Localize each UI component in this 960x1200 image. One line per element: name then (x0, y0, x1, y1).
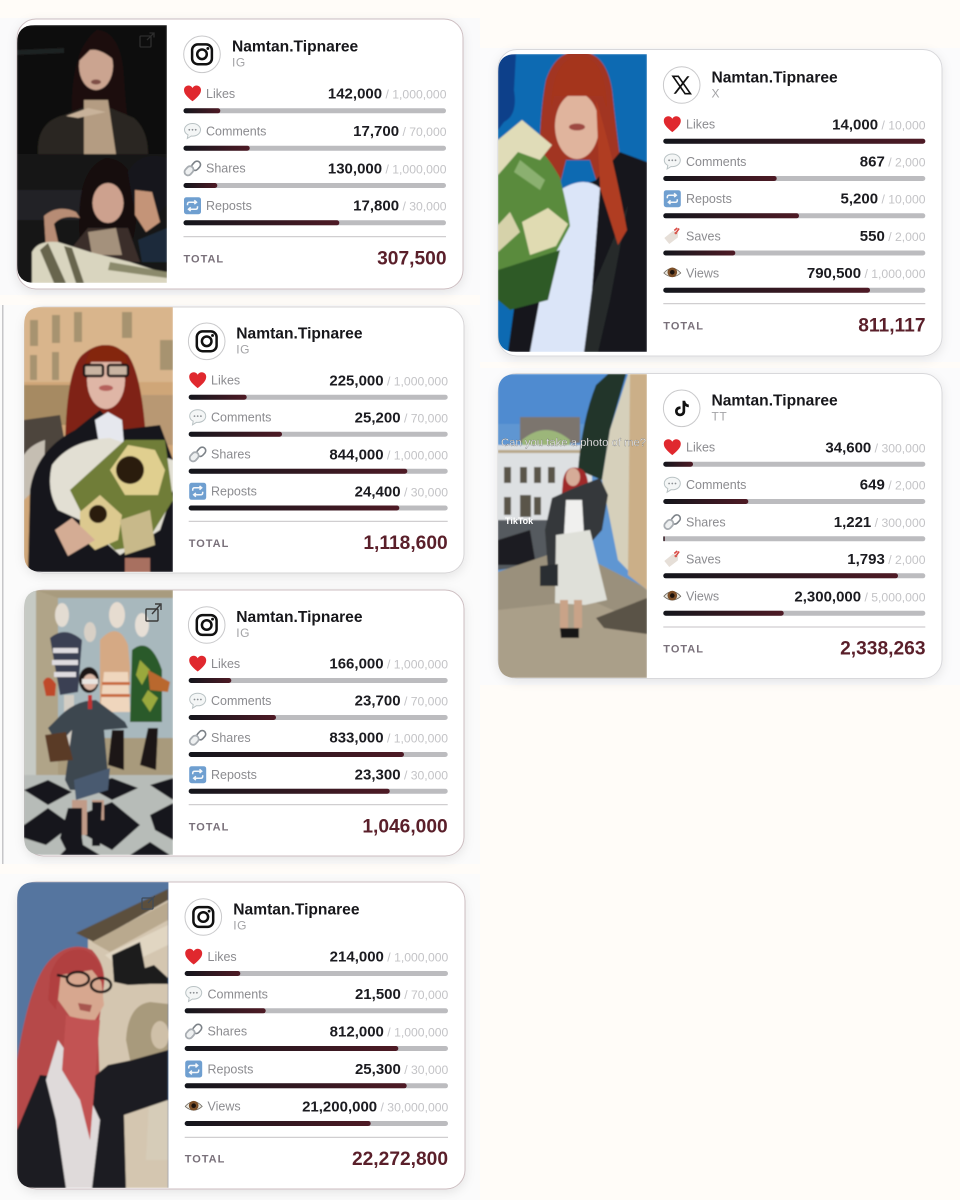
total: 307,500 (377, 248, 446, 270)
row: reposts: Reposts (206, 199, 252, 213)
row: likes (185, 949, 449, 976)
row: saves: Saves (686, 552, 721, 566)
row: likes: Likes (686, 441, 715, 455)
total (185, 1149, 448, 1170)
total: TOTAL (663, 643, 704, 655)
row: saves: 550 / 2,000 (860, 228, 926, 245)
card background (498, 50, 942, 356)
row: comments: Comments (211, 694, 271, 708)
total: TOTAL (663, 320, 704, 332)
row: reposts (189, 483, 448, 510)
row: views (185, 1098, 449, 1126)
TikTok watermark: TikTok (505, 516, 534, 526)
name: Namtan.Tipnaree (236, 609, 363, 626)
row: shares: Shares (206, 162, 246, 176)
platform: IG (236, 626, 250, 640)
row: views (663, 265, 926, 293)
row: reposts (185, 1060, 449, 1088)
row: likes: 14,000 / 10,000 (832, 116, 926, 133)
card background (24, 307, 464, 573)
row: reposts: Reposts (211, 485, 257, 499)
total: TOTAL (184, 253, 224, 265)
row: comments: 23,700 / 70,000 (355, 693, 448, 710)
row: saves (663, 228, 926, 256)
card background (24, 590, 464, 856)
row: shares: Shares (686, 515, 726, 529)
avatar: Instagram (188, 607, 225, 643)
row: likes: Likes (206, 87, 235, 101)
name: Namtan.Tipnaree (712, 69, 838, 86)
row: shares: 1,221 / 300,000 (834, 514, 926, 531)
avatar: Instagram (188, 323, 225, 360)
panel: X card 811,117 (498, 50, 942, 356)
row: shares (188, 729, 448, 757)
row: likes: 142,000 / 1,000,000 (328, 86, 447, 102)
row: views: 21,200,000 / 30,000,000 (302, 1098, 449, 1115)
avatar: TikTok (663, 390, 700, 427)
card background (498, 374, 942, 678)
row: likes (184, 86, 447, 113)
total (663, 316, 926, 337)
row: comments: Comments (211, 411, 271, 425)
row: comments (663, 154, 926, 181)
photo caption: Can you take a photo of me? (501, 437, 646, 449)
row: comments: Comments (206, 124, 266, 138)
icon: external link (146, 604, 161, 621)
row: views (663, 588, 926, 616)
row: comments: 21,500 / 70,000 (355, 986, 449, 1003)
row: views: Views (686, 266, 719, 280)
card background (18, 882, 465, 1189)
platform: TT (712, 410, 727, 424)
row: comments: 25,200 / 70,000 (355, 409, 448, 426)
row: shares: 812,000 / 1,000,000 (330, 1023, 449, 1040)
row: likes: 34,600 / 300,000 (825, 439, 926, 456)
total: 1,046,000 (362, 816, 448, 837)
row: shares (184, 1023, 449, 1051)
total: TOTAL (189, 821, 229, 833)
row: shares: 130,000 / 1,000,000 (328, 160, 447, 177)
panel: TikTok card 2,338,263 (498, 374, 942, 678)
total (189, 533, 448, 554)
icon: external link (140, 33, 154, 47)
total (663, 639, 926, 660)
total: TOTAL (189, 538, 229, 550)
row: saves: Saves (686, 229, 721, 243)
row: comments: 17,700 / 70,000 (353, 123, 447, 140)
row: likes (189, 372, 448, 400)
total (189, 816, 448, 837)
row: shares: Shares (211, 448, 251, 462)
row: comments (184, 123, 447, 151)
row: views: Views (686, 590, 719, 604)
row: saves (663, 551, 926, 578)
row: reposts: 23,300 / 30,000 (355, 767, 448, 784)
row: comments: Comments (208, 987, 268, 1001)
row: reposts: 24,400 / 30,000 (355, 483, 448, 500)
platform: IG (232, 56, 246, 70)
row: comments: Comments (686, 155, 746, 169)
row: shares: 833,000 / 1,000,000 (329, 730, 448, 747)
panel: Instagram card 1,118,600 (24, 307, 464, 573)
total (184, 248, 446, 270)
row: comments (663, 477, 926, 504)
name: Namtan.Tipnaree (712, 393, 838, 410)
row: likes: Likes (211, 657, 240, 671)
row: likes: Likes (686, 118, 715, 132)
panel: Instagram card 307,500 (17, 19, 463, 289)
total: 2,338,263 (840, 639, 926, 660)
row: shares: Shares (208, 1025, 247, 1039)
row: likes (189, 656, 448, 683)
row: comments (189, 693, 448, 720)
total: 811,117 (858, 316, 926, 337)
photo: red-haired woman with sunflowers on blue (498, 52, 647, 352)
row: reposts: Reposts (208, 1062, 253, 1076)
total: 1,118,600 (363, 533, 448, 554)
row: shares (663, 513, 926, 541)
avatar: X (663, 67, 700, 103)
row: views: 2,300,000 / 5,000,000 (794, 588, 926, 605)
platform: X (712, 86, 720, 100)
row: likes (663, 439, 926, 467)
photo: woman with glasses and sunflower bouquet (24, 307, 173, 572)
row: reposts: Reposts (686, 192, 732, 206)
total: TOTAL (185, 1154, 225, 1166)
row: likes: Likes (208, 950, 237, 964)
photo: woman in white skirt on a street in Milan (498, 374, 647, 678)
row: reposts: 5,200 / 10,000 (841, 191, 926, 208)
name: Namtan.Tipnaree (236, 326, 363, 343)
icon: external link (142, 896, 155, 909)
name: Namtan.Tipnaree (232, 39, 359, 56)
photo: red-haired woman with glasses against stone building (17, 882, 169, 1188)
row: comments: 867 / 2,000 (860, 154, 926, 170)
name: Namtan.Tipnaree (233, 902, 360, 918)
panel: Instagram card 1,046,000 (24, 590, 464, 856)
row: reposts: 17,800 / 30,000 (353, 198, 447, 215)
row: comments: 649 / 2,000 (860, 477, 926, 494)
row: reposts (189, 766, 448, 794)
photo: woman posing by a boutique window with mannequins (24, 590, 173, 855)
row: comments (189, 409, 448, 437)
photo: two portraits of a woman in a leather jacket (17, 25, 167, 283)
row: shares (183, 160, 447, 188)
avatar: Instagram (184, 36, 220, 73)
row: reposts: Reposts (211, 768, 257, 782)
row: likes: 225,000 / 1,000,000 (329, 372, 448, 389)
avatar: Instagram (185, 899, 222, 935)
row: saves: 1,793 / 2,000 (847, 551, 926, 568)
platform: IG (236, 343, 250, 357)
row: shares (188, 446, 448, 474)
row: likes: Likes (211, 374, 240, 388)
row: shares: Shares (211, 731, 251, 745)
row: comments (185, 986, 449, 1013)
row: comments: Comments (686, 478, 746, 492)
row: likes: 166,000 / 1,000,000 (329, 656, 448, 673)
panel: Instagram card 22,272,800 (17, 882, 465, 1189)
row: reposts (184, 197, 447, 225)
row: views: Views (208, 1100, 241, 1114)
total: 22,272,800 (352, 1149, 448, 1170)
row: reposts: 25,300 / 30,000 (355, 1061, 449, 1078)
row: likes: 214,000 / 1,000,000 (330, 949, 449, 966)
row: shares: 844,000 / 1,000,000 (329, 446, 448, 463)
row: reposts (663, 190, 926, 218)
row: likes (663, 116, 926, 144)
platform: IG (233, 918, 247, 932)
card background (17, 19, 463, 289)
row: views: 790,500 / 1,000,000 (807, 265, 926, 282)
